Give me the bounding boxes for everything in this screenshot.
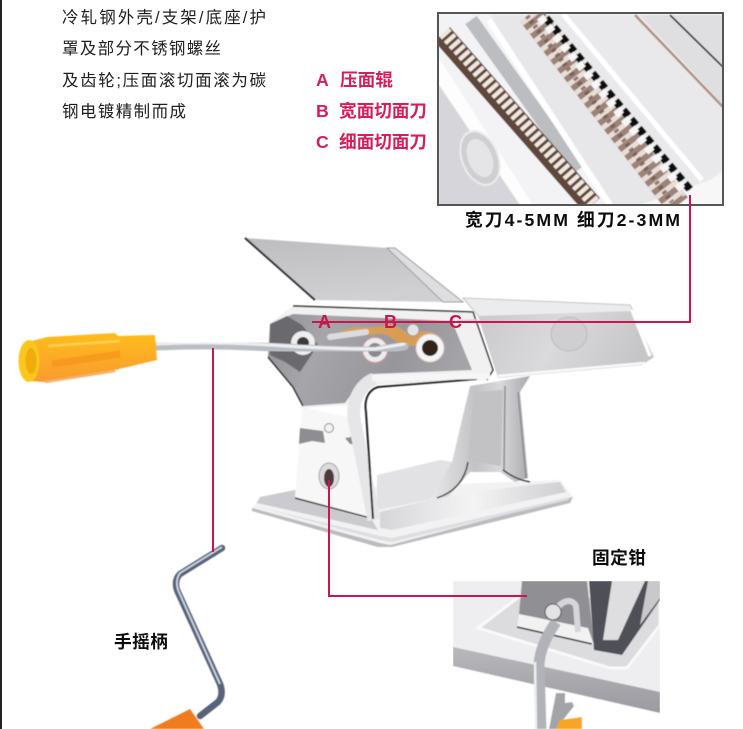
- legend: A B C parts: B: [316, 101, 329, 121]
- leader lines: [213, 195, 690, 596]
- legend: A B C parts: C: [316, 132, 329, 152]
- left border line: [0, 0, 2, 729]
- gear slot: [330, 332, 366, 337]
- text block: materials description: 钢电镀精制而成: [62, 102, 186, 121]
- base plate: [252, 480, 573, 547]
- inset photo: cutter rollers close-up: [438, 13, 723, 205]
- inset photo: clamp on table: [453, 581, 660, 729]
- orange gear highlight: [340, 324, 440, 346]
- caption: cutter widths: 宽刀4-5MM 细刀2-3MM: [465, 209, 680, 230]
- label: fixing clamp: 固定钳: [592, 547, 646, 568]
- machine callout letters: A: [318, 312, 331, 332]
- logo stamp: [459, 130, 500, 186]
- text block: materials description: 罩及部分不锈钢螺丝: [62, 39, 221, 58]
- table top: [453, 581, 660, 692]
- detached crank handle: [150, 547, 222, 729]
- text block: materials description: 及齿轮;压面滚切面滚为碳: [62, 71, 266, 90]
- crank rod on machine: [157, 343, 404, 351]
- text block: materials description: 冷轧钢外壳/支架/底座/护: [62, 8, 266, 27]
- roller A teeth: [442, 32, 594, 205]
- text block: materials description: [62, 8, 266, 121]
- shaft holes: [291, 324, 444, 362]
- machine callout letters: C: [449, 312, 462, 332]
- machine base: [478, 596, 660, 668]
- pasta machine: [245, 238, 654, 547]
- legend: A B C parts: 压面辊: [340, 70, 393, 90]
- legend: A B C parts: 宽面切面刀: [339, 100, 427, 121]
- tray in the frame opening: [377, 460, 458, 510]
- machine callout letters: [318, 312, 462, 332]
- front side plate: [268, 306, 493, 408]
- legend: A B C parts: [316, 70, 427, 152]
- label: hand crank: 手摇柄: [114, 632, 168, 652]
- legend: A B C parts: 细面切面刀: [339, 132, 427, 152]
- clamp screw plate: [549, 693, 574, 729]
- right cutter housing: [463, 298, 654, 378]
- machine leg: [518, 581, 594, 643]
- lower front plate: [295, 407, 370, 517]
- orange handle knob: [18, 333, 157, 382]
- cutter B teeth: [527, 14, 692, 205]
- machine callout letters: B: [384, 312, 397, 332]
- feed tray: [245, 238, 463, 302]
- rear leg: [430, 376, 530, 499]
- machine side: [589, 581, 660, 655]
- crank rod: [539, 622, 556, 729]
- legend: A B C parts: A: [316, 70, 329, 90]
- main frame window edge: [354, 376, 490, 520]
- table edge: [453, 647, 660, 713]
